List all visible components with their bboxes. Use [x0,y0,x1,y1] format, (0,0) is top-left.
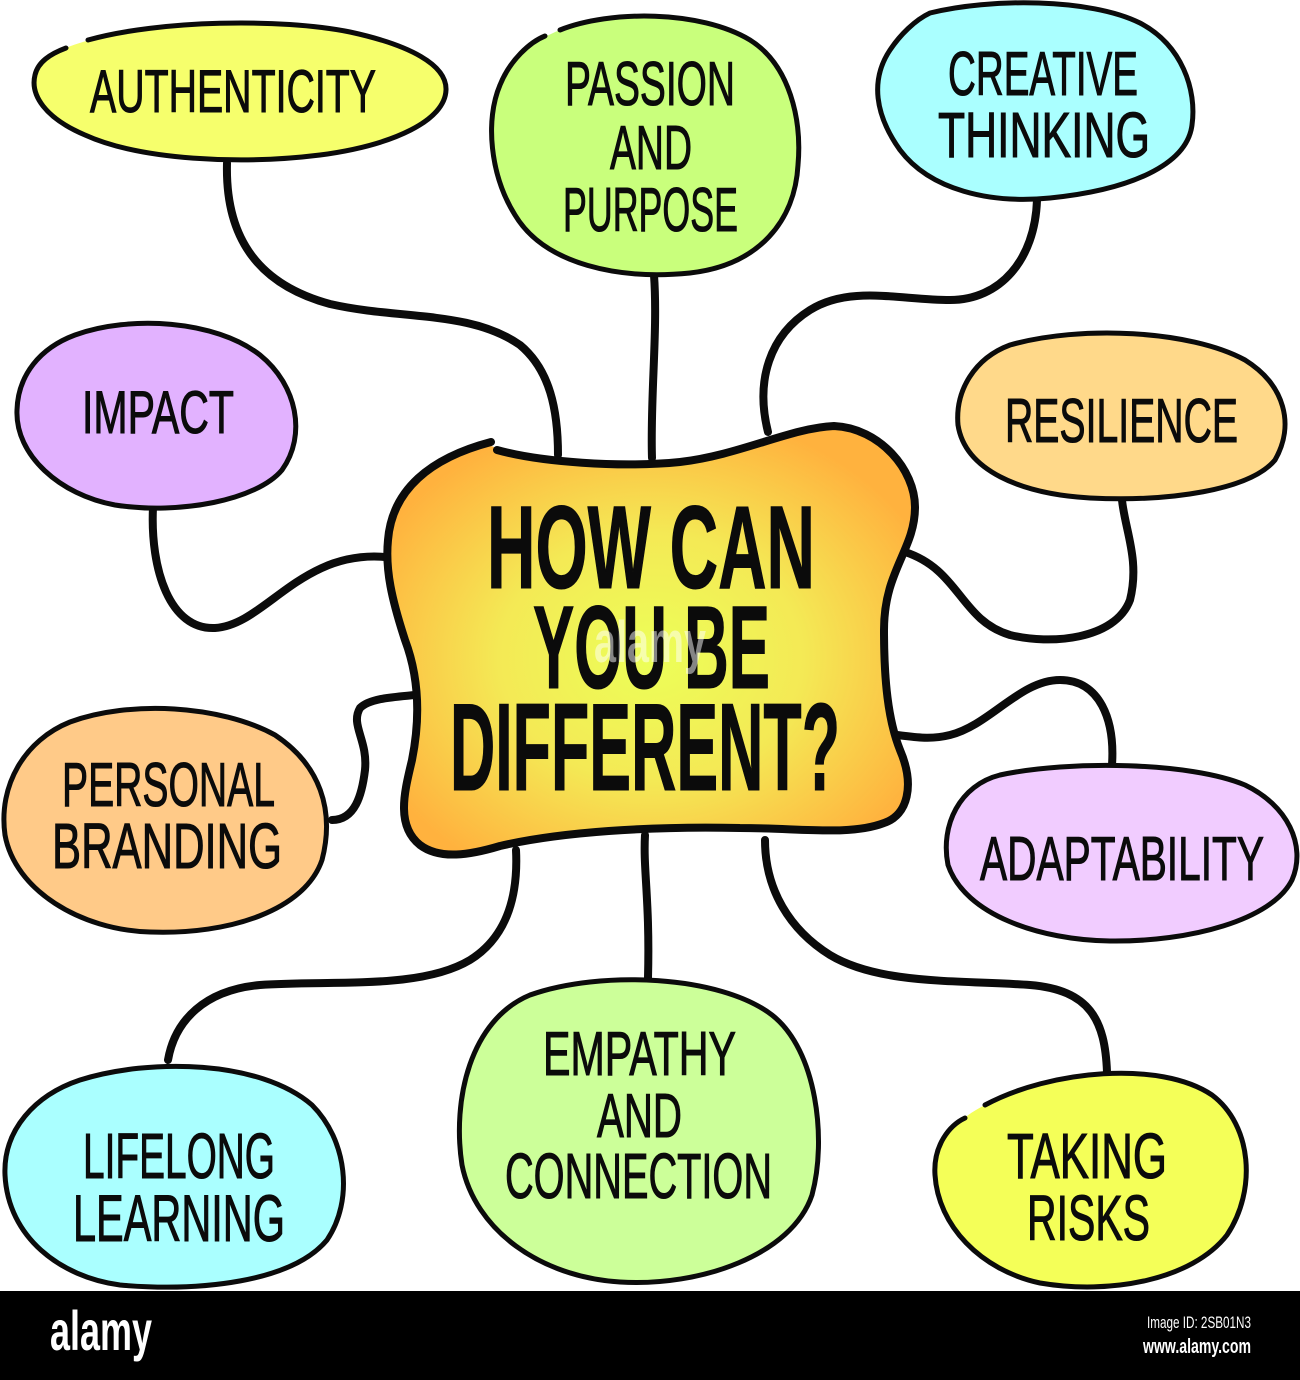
connector: creative thinking [763,200,1037,432]
node: authenticity [34,23,446,160]
node: personal branding [4,708,327,932]
central heading: YOU BE [533,582,770,714]
central heading: HOW CAN [487,482,815,614]
connector: passion and purpose [652,275,655,458]
node: taking risks: TAKING [1007,1120,1167,1192]
node: resilience [958,333,1285,499]
node: creative thinking [878,3,1193,199]
node: impact [17,323,296,508]
node: personal branding: PERSONAL [62,751,275,820]
node: empathy and connection: EMPATHY [543,1020,736,1089]
node: passion and purpose: PURPOSE [563,176,738,245]
node: impact: IMPACT [82,379,234,446]
node: taking risks: RISKS [1027,1182,1150,1254]
footer bar [0,1291,1300,1380]
node: taking risks [935,1073,1246,1287]
footer logo: alamy [50,1299,152,1362]
node: lifelong learning: LIFELONG [83,1120,275,1192]
node: lifelong learning: LEARNING [73,1181,285,1255]
connector: impact [153,507,385,628]
connector: personal branding [332,695,415,820]
connector: adaptability [897,680,1112,765]
node: passion and purpose: PASSION [565,50,735,119]
connector: empathy and connection [645,835,648,978]
footer image id: Image ID: 2SB01N3 [1147,1313,1251,1332]
node: empathy and connection: AND [597,1082,682,1151]
node: authenticity: AUTHENTICITY [90,58,376,125]
node: adaptability [946,765,1297,941]
node: lifelong learning [5,1066,343,1287]
connector: authenticity [227,163,558,455]
node: creative thinking: THINKING [938,99,1150,171]
connector: taking risks [765,840,1107,1072]
central node: how can you be different [387,426,915,855]
node: creative thinking: CREATIVE [948,40,1138,109]
node: passion and purpose [492,16,799,275]
node: empathy and connection [459,980,819,1283]
connector: lifelong learning [168,850,516,1060]
node: passion and purpose: AND [610,114,692,183]
footer url: www.alamy.com [1142,1336,1251,1358]
central heading [450,482,840,817]
node: personal branding: BRANDING [52,810,282,882]
central heading: DIFFERENT? [450,679,840,817]
watermark: alamy [594,610,706,675]
node: empathy and connection: CONNECTION [505,1140,772,1212]
connector: resilience [905,500,1133,639]
